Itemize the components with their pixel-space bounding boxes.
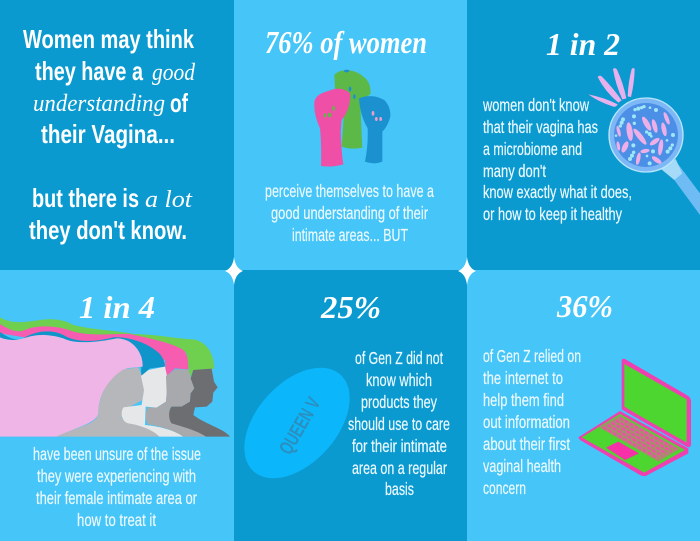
text: of Gen Z did not know (348, 348, 450, 499)
heading: women may think (23, 24, 196, 149)
text: of Gen Z did not know: area on a regular (352, 458, 447, 478)
text: have been unsure: have been unsure of the issue (33, 444, 201, 464)
text: of Gen Z relied on: vaginal health (483, 456, 561, 476)
text: of Gen Z relied on: of Gen Z relied on (483, 346, 581, 366)
icon: laptop (578, 359, 691, 476)
stat heading: 76% of women: 76% of women (265, 24, 427, 60)
panel: 1 in 2 (467, 0, 700, 270)
heading: but there is a lot: a lot (145, 187, 193, 213)
text: of Gen Z did not know: of Gen Z did not (355, 348, 443, 368)
icon: sparkle right (458, 257, 476, 285)
stat heading: 1 in 4: 1 in 4 (79, 289, 155, 325)
text: of Gen Z relied on (483, 346, 581, 498)
panel: 76% of women (234, 0, 467, 270)
text: women don't know: know exactly what it does, (483, 182, 632, 202)
stat heading: 1 in 2: 1 in 2 (546, 26, 620, 62)
text: have been unsure (33, 444, 201, 530)
icon: Queen V pill (224, 348, 370, 498)
text: women don't know: a microbiome and (483, 139, 582, 159)
text: of Gen Z did not know: know which (366, 370, 432, 390)
icon: Queen V pill: QUEEN V (275, 393, 326, 458)
text: of Gen Z did not know: for their intimate (352, 436, 447, 456)
text: of Gen Z did not know: products they (361, 392, 437, 412)
text: of Gen Z relied on: out information (483, 412, 570, 432)
stat heading: 25%: 25% (320, 289, 381, 325)
text: of Gen Z relied on: help them find (483, 390, 564, 410)
text: women don't know: or how to keep it healthy (483, 204, 622, 224)
text: perceive themselves: intimate areas... BUT (292, 225, 408, 245)
text: have been unsure: how to treat it (77, 510, 156, 530)
stat heading: 36%: 36% (556, 288, 613, 324)
text: of Gen Z relied on: concern (483, 478, 526, 498)
panel: intro statement (0, 0, 234, 270)
heading: women may think: good (152, 60, 196, 86)
heading: women may think: understanding (33, 91, 165, 117)
text: of Gen Z did not know: should use to care (348, 414, 450, 434)
icon: magnifying glass with bacteria (588, 68, 700, 215)
panel: 25% (224, 270, 467, 541)
text: women don't know (482, 95, 632, 224)
text: of Gen Z relied on: about their first (483, 434, 570, 454)
icon: sparkle left (225, 257, 243, 285)
heading: women may think: they have a (35, 56, 143, 86)
heading: women may think: Women may think (23, 24, 194, 54)
text: of Gen Z did not know: basis (385, 479, 414, 499)
text: of Gen Z relied on: the internet to (483, 368, 563, 388)
text: perceive themselves (265, 181, 434, 245)
icon: raised fists (314, 70, 390, 167)
panel: 36% (467, 270, 700, 541)
panel: 1 in 4 (0, 270, 234, 541)
heading: women may think: their Vagina... (41, 119, 175, 149)
text: women don't know: women don't know (482, 95, 589, 115)
text: have been unsure: their female intimate area or (36, 488, 197, 508)
heading: but there is a lot: they don't know. (29, 215, 187, 245)
text: have been unsure: they were experiencing with (37, 466, 196, 486)
illustration: profile heads with flowing hair (0, 317, 230, 437)
heading: women may think: of (170, 88, 188, 118)
text: perceive themselves: perceive themselves to have a (265, 181, 434, 201)
heading: but there is a lot (29, 183, 193, 245)
text: perceive themselves: good understanding of their (271, 203, 428, 223)
heading: but there is a lot: but there is (32, 183, 139, 213)
text: women don't know: many don't (483, 161, 546, 181)
text: women don't know: that their vagina has (483, 117, 598, 137)
